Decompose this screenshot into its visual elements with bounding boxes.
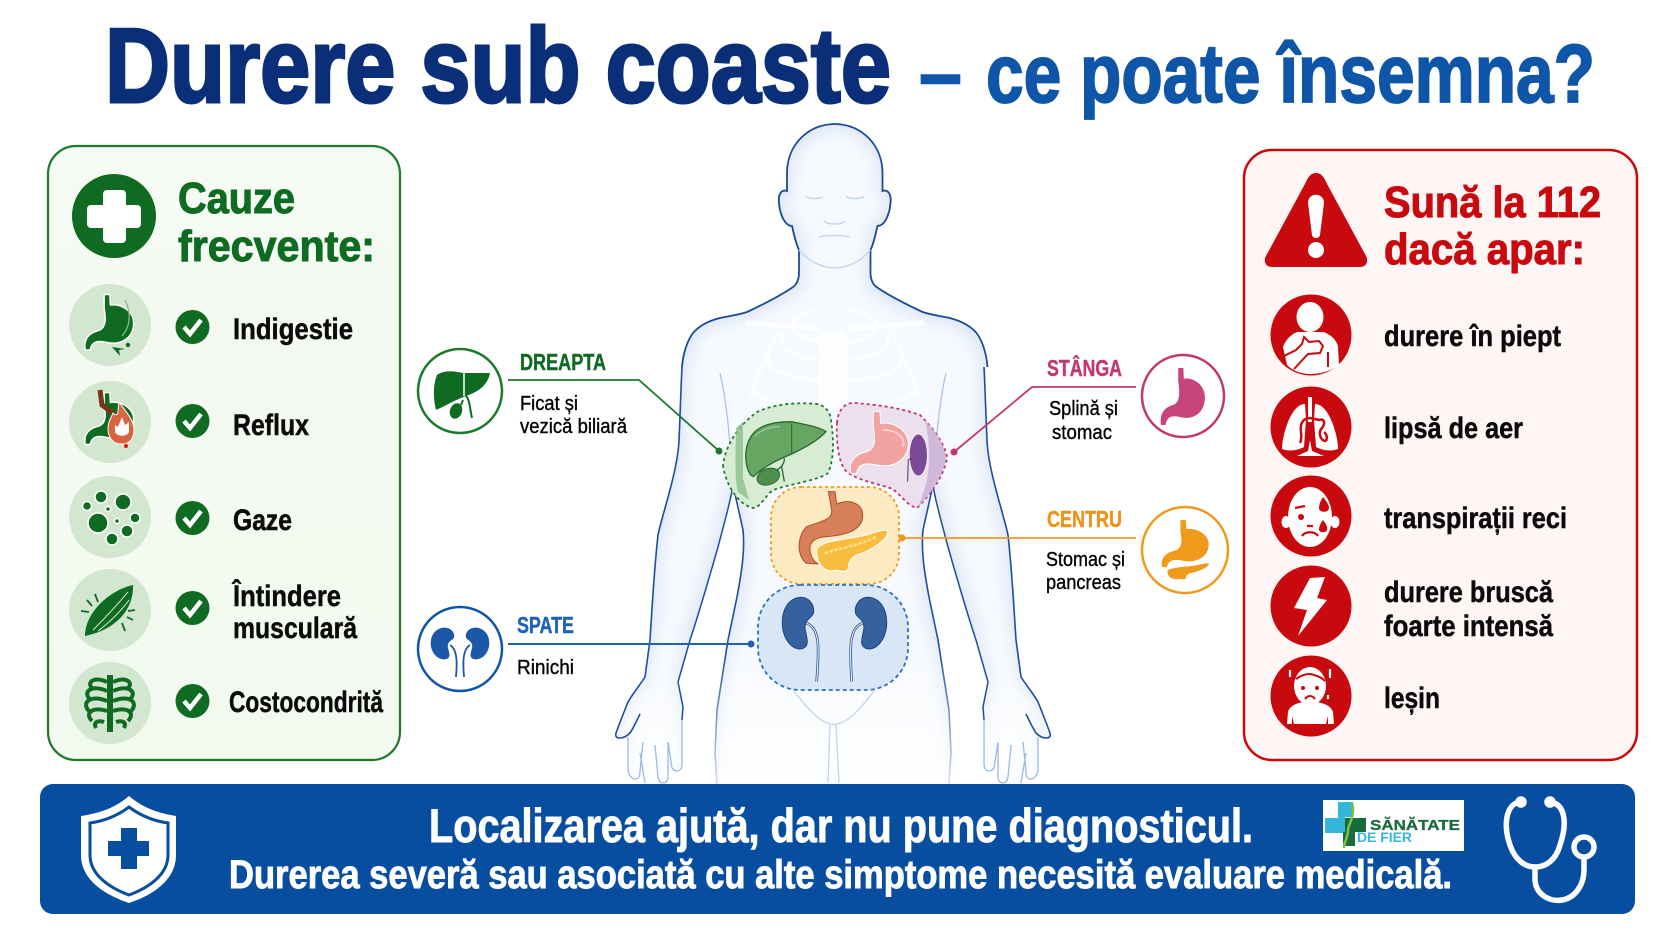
panel heading: Sună la 112	[1384, 178, 1601, 227]
item: costocondrita	[69, 662, 383, 744]
panel heading	[1384, 178, 1601, 274]
title: Durere sub coaste	[105, 7, 891, 125]
zone: stomach and pancreas orange	[771, 487, 899, 584]
item: intindere musculara: musculară	[233, 612, 357, 645]
title: –	[919, 26, 962, 121]
item: costocondrita: Costocondrită	[229, 686, 383, 719]
icon: kidneys	[431, 628, 489, 677]
item: durere brusca: foarte intensă	[1384, 610, 1553, 643]
callout: centru: CENTRU	[1047, 506, 1122, 532]
callout: spate: Rinichi	[517, 657, 574, 679]
logo	[1323, 800, 1464, 851]
logo: DE FIER	[1357, 829, 1412, 845]
zone: kidneys blue	[758, 585, 908, 690]
icon: green plus	[72, 174, 156, 258]
callout: stanga: Splină și	[1049, 398, 1118, 420]
zone: stomach and spleen pink	[837, 403, 947, 508]
callout: centru	[898, 506, 1228, 594]
zone: liver green	[723, 403, 833, 508]
logo: SĂNĂTATE	[1370, 817, 1460, 834]
callout: centru: pancreas	[1046, 572, 1121, 594]
callout: stanga: STÂNGA	[1047, 354, 1122, 381]
banner text	[229, 799, 1452, 897]
item: reflux	[69, 381, 309, 463]
item: reflux: Reflux	[233, 409, 309, 442]
icon: stethoscope	[1506, 799, 1594, 900]
item: gaze	[69, 476, 292, 558]
callout: stanga	[950, 354, 1224, 456]
icon: stomach and pancreas	[1162, 520, 1209, 579]
item: gaze: Gaze	[233, 504, 292, 537]
item: transpiratii reci: transpirații reci	[1384, 502, 1567, 535]
callout: centru: Stomac și	[1046, 549, 1125, 571]
banner text: Durerea severă sau asociată cu alte simptome necesită evaluare medicală.	[229, 853, 1452, 897]
body figure	[600, 124, 1070, 784]
item: lesin	[1270, 656, 1440, 736]
callout: dreapta	[418, 349, 722, 454]
item: durere brusca	[1270, 566, 1553, 646]
title	[105, 7, 1595, 125]
item: indigestie	[69, 284, 353, 366]
icon: shield	[81, 796, 176, 903]
panel heading	[178, 174, 375, 271]
callout: dreapta: vezică biliară	[520, 416, 628, 438]
item: indigestie: Indigestie	[233, 313, 353, 346]
panel: cauze frecvente	[48, 146, 400, 760]
callout: stanga: stomac	[1052, 422, 1112, 444]
callout: dreapta: Ficat și	[520, 393, 578, 415]
icon: liver	[434, 371, 490, 421]
panel heading: frecvente:	[178, 222, 375, 271]
icon: stomach pink	[1161, 368, 1205, 425]
item: transpiratii reci	[1270, 476, 1567, 556]
item: intindere musculara	[69, 569, 357, 651]
item: lesin: leșin	[1384, 682, 1440, 715]
item: lipsa de aer	[1270, 386, 1523, 468]
callout: dreapta: DREAPTA	[520, 349, 606, 375]
item: durere in piept: durere în piept	[1384, 320, 1561, 353]
panel heading: dacă apar:	[1384, 225, 1585, 274]
banner	[40, 784, 1635, 914]
item: durere in piept	[1270, 294, 1561, 376]
callout: spate	[418, 607, 754, 691]
item: intindere musculara: Întindere	[231, 579, 341, 613]
callout: spate: SPATE	[517, 612, 574, 638]
item: lipsa de aer: lipsă de aer	[1384, 412, 1523, 445]
panel: suna la 112	[1244, 150, 1637, 760]
banner text: Localizarea ajută, dar nu pune diagnosticul.	[429, 799, 1253, 852]
panel heading: Cauze	[178, 174, 295, 223]
icon: warning triangle	[1265, 173, 1367, 267]
item: durere brusca: durere bruscă	[1384, 576, 1553, 609]
